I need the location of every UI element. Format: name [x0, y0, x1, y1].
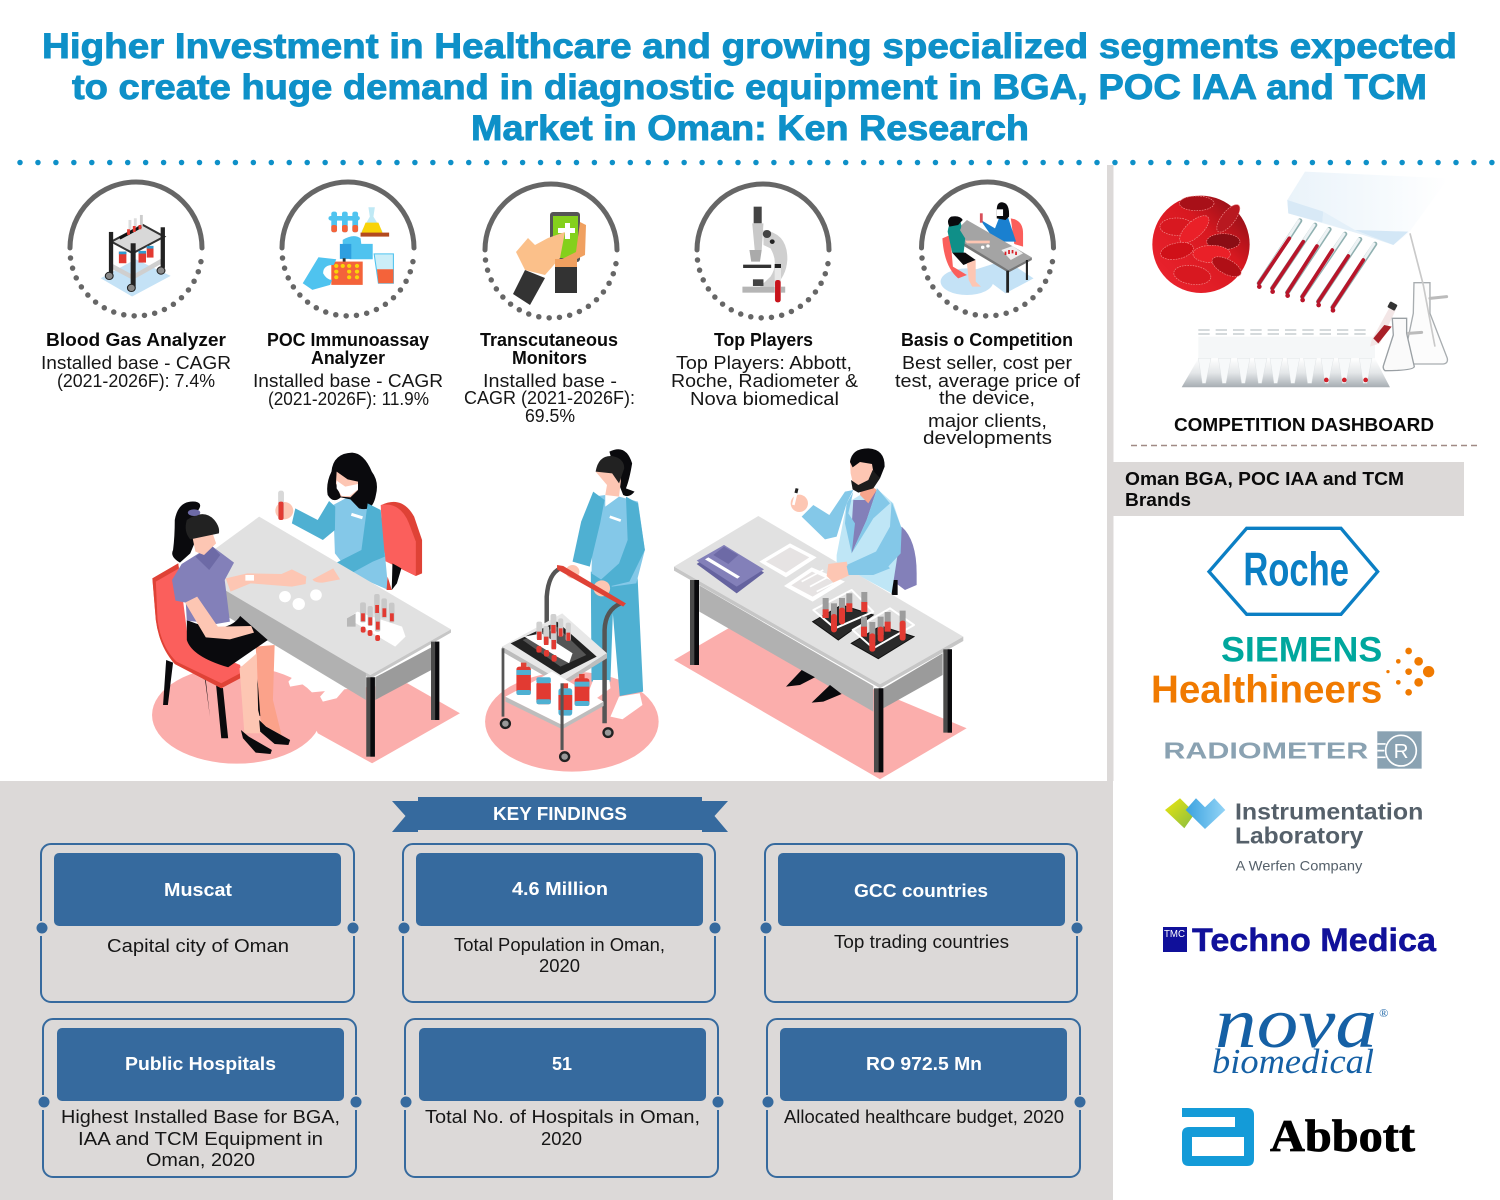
icon: analyzer cart — [101, 215, 171, 297]
panel: basis of competition — [895, 182, 1081, 448]
heading: brands: Brands — [1125, 490, 1191, 510]
heading: transcutaneous monitors: Transcutaneous — [480, 330, 618, 350]
logo: Nova Biomedical: biomedical — [1212, 1042, 1374, 1081]
logo: Techno Medica: TMC — [1164, 929, 1185, 940]
heading: blood gas analyzer: Blood Gas Analyzer — [46, 330, 226, 350]
card: population: 4.6 Million — [512, 879, 608, 899]
panel: vertical divider — [1107, 165, 1114, 781]
card: Muscat: Capital city of Oman — [107, 936, 289, 956]
text: top players list: Top Players: Abbott, — [676, 353, 852, 373]
icon ring: blood gas analyzer — [70, 182, 202, 316]
heading: brands — [1113, 462, 1464, 516]
logo: Roche: Roche — [1243, 544, 1349, 597]
card: public hospitals: Oman, 2020 — [146, 1150, 255, 1170]
card: Muscat — [36, 844, 359, 1002]
panel: key findings background — [0, 781, 1113, 1200]
text: blood gas analyzer CAGR: (2021-2026F): 7.4% — [57, 371, 215, 391]
logo: Radiometer — [1163, 731, 1422, 769]
heading: competition dashboard: COMPETITION DASHBOARD — [1174, 415, 1434, 435]
heading: basis of competition: Basis o Competition — [901, 330, 1073, 350]
text: blood gas analyzer CAGR: Installed base - CAGR — [41, 353, 231, 373]
text: POC CAGR: Installed base - CAGR — [253, 371, 443, 391]
logo: Instrumentation Laboratory — [1165, 798, 1423, 874]
panel: top players — [671, 184, 858, 409]
title: Higher Investment in Healthcare and growing specialized segments expected — [42, 27, 1457, 66]
icon ring: competition — [922, 182, 1054, 316]
card: hospitals count: 51 — [552, 1054, 572, 1074]
card: Muscat: Muscat — [164, 880, 232, 900]
heading: transcutaneous monitors: Monitors — [512, 348, 587, 368]
icon: hands holding phone — [513, 212, 586, 305]
image: multichannel pipette — [1257, 172, 1448, 313]
image: flasks and tube — [1370, 233, 1447, 371]
text: basis of competition list: major clients, — [928, 411, 1047, 431]
image: sample plate — [1182, 330, 1390, 387]
text: basis of competition list — [895, 353, 1081, 448]
text: top players list: Nova biomedical — [690, 389, 839, 409]
text: basis of competition list: the device, — [939, 388, 1035, 408]
icon: lab hands and samples — [303, 207, 393, 290]
logo: Siemens Healthineers: SIEMENS — [1221, 631, 1382, 670]
illustration: patient and nurse at desk — [152, 453, 460, 764]
card: hospitals count — [400, 1019, 724, 1177]
title: Market in Oman: Ken Research — [471, 109, 1029, 148]
text: transcutaneous CAGR: 69.5% — [525, 406, 575, 426]
card: hospitals count: Total No. of Hospitals in Oman, — [425, 1107, 700, 1127]
card: public hospitals: Public Hospitals — [125, 1054, 276, 1074]
logo: Instrumentation Laboratory: A Werfen Company — [1236, 858, 1362, 874]
card: GCC countries: GCC countries — [854, 881, 988, 901]
card: public hospitals: Highest Installed Base for BGA, — [61, 1107, 340, 1127]
logo: Siemens Healthineers: Healthineers — [1151, 668, 1382, 712]
illustration: nurse with cart — [485, 449, 659, 772]
logo: Radiometer: RADIOMETER — [1163, 737, 1368, 763]
text: transcutaneous CAGR — [464, 371, 635, 426]
card: population: Total Population in Oman, — [454, 935, 665, 955]
card: population — [398, 844, 720, 1002]
card: healthcare budget: RO 972.5 Mn — [866, 1054, 982, 1074]
logo: Radiometer: R — [1394, 740, 1409, 763]
title: to create huge demand in diagnostic equipment in BGA, POC IAA and TCM — [72, 68, 1427, 107]
text: transcutaneous CAGR: CAGR (2021-2026F): — [464, 388, 635, 408]
card: public hospitals: IAA and TCM Equipment in — [78, 1129, 323, 1149]
illustration: doctor at desk with samples — [674, 448, 967, 779]
icon ring: transcutaneous — [485, 184, 617, 318]
icon ring: top players — [697, 184, 829, 318]
text: basis of competition list: test, average price of — [895, 371, 1081, 391]
heading: top players: Top Players — [714, 330, 813, 350]
card: population: 2020 — [539, 956, 580, 976]
logo: Nova Biomedical: ® — [1379, 1006, 1388, 1020]
heading: POC immunoassay analyzer: Analyzer — [311, 348, 385, 368]
image: red blood cells — [1152, 196, 1250, 293]
text: basis of competition list: Best seller, cost per — [902, 353, 1072, 373]
card: GCC countries: Top trading countries — [834, 932, 1009, 952]
logo: Nova Biomedical — [1212, 983, 1388, 1081]
panel: blood gas analyzer — [41, 182, 231, 391]
text: top players list — [671, 353, 858, 409]
banner: key findings: KEY FINDINGS — [493, 804, 627, 824]
heading: POC immunoassay analyzer — [267, 330, 429, 368]
image: blood sample equipment — [1152, 172, 1448, 387]
logo: Siemens Healthineers — [1151, 631, 1434, 712]
logo: Instrumentation Laboratory: Instrumentation — [1235, 798, 1423, 824]
heading: brands: Oman BGA, POC IAA and TCM — [1125, 469, 1404, 489]
heading: POC immunoassay analyzer: POC Immunoassay — [267, 330, 429, 350]
icon: consultation scene — [941, 202, 1034, 295]
logo: Abbott — [1182, 1108, 1416, 1166]
card: healthcare budget — [762, 1019, 1086, 1177]
text: POC CAGR: (2021-2026F): 11.9% — [268, 389, 429, 409]
panel: transcutaneous monitors — [464, 184, 635, 426]
logo: Instrumentation Laboratory: Laboratory — [1235, 822, 1363, 848]
logo: Nova Biomedical: nova — [1215, 983, 1377, 1063]
text: transcutaneous CAGR: Installed base - — [483, 371, 617, 391]
text: basis of competition list: developments — [923, 428, 1052, 448]
text: POC CAGR — [253, 371, 443, 409]
card: public hospitals — [38, 1019, 362, 1177]
logo: Techno Medica: Techno Medica — [1192, 922, 1436, 958]
logo: Roche — [1209, 528, 1378, 614]
card: GCC countries — [760, 844, 1082, 1002]
banner: key findings — [392, 797, 728, 832]
text: top players list: Roche, Radiometer & — [671, 371, 858, 391]
heading: transcutaneous monitors — [480, 330, 618, 368]
icon ring: POC — [282, 182, 414, 316]
logo: Abbott: Abbott — [1270, 1110, 1416, 1161]
text: blood gas analyzer CAGR — [41, 353, 231, 391]
icon: microscope — [742, 207, 787, 302]
panel: POC immunoassay analyzer — [253, 182, 443, 409]
card: healthcare budget: Allocated healthcare budget, 2020 — [784, 1107, 1064, 1127]
title — [42, 27, 1457, 148]
card: hospitals count: 2020 — [541, 1129, 582, 1149]
